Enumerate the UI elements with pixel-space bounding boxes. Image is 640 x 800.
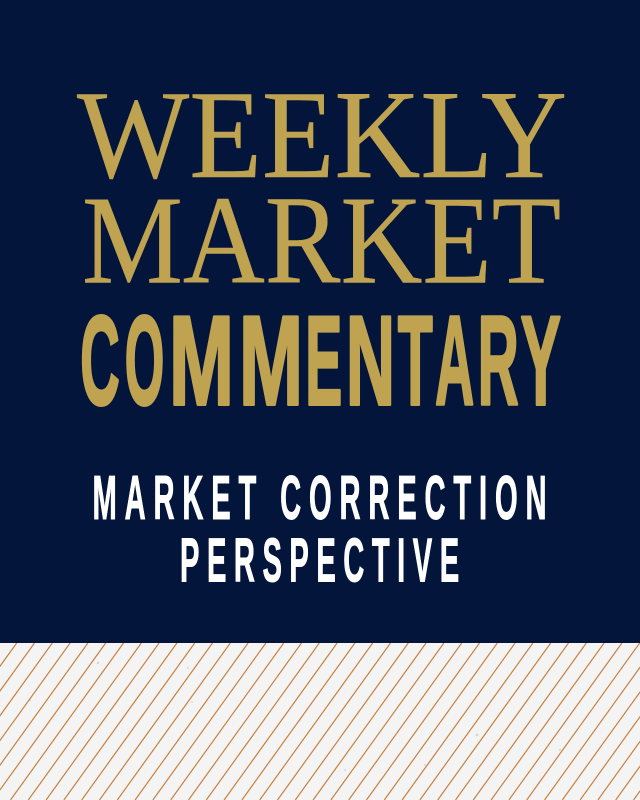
subtitle: PERSPECTIVE: PERSPECTIVE bbox=[180, 526, 459, 595]
subtitle: MARKET CORRECTION: MARKET CORRECTION bbox=[92, 464, 547, 533]
title: COMMENTARY: T bbox=[398, 290, 433, 432]
panel: hatched paper band bbox=[0, 643, 640, 800]
title: COMMENTARY: E bbox=[305, 290, 342, 432]
title: COMMENTARY: C bbox=[80, 290, 120, 432]
title: COMMENTARY: M bbox=[169, 290, 234, 432]
title: COMMENTARY: R bbox=[478, 290, 519, 432]
infographic cover: Y bbox=[520, 290, 561, 432]
title: COMMENTARY: A bbox=[435, 290, 474, 432]
title: WEEKLY: WEEKLY bbox=[77, 66, 567, 205]
title: MARKET: MARKET bbox=[82, 172, 561, 310]
title: COMMENTARY: O bbox=[125, 290, 164, 432]
title: COMMENTARY: M bbox=[239, 290, 303, 432]
title: COMMENTARY: N bbox=[346, 290, 395, 432]
